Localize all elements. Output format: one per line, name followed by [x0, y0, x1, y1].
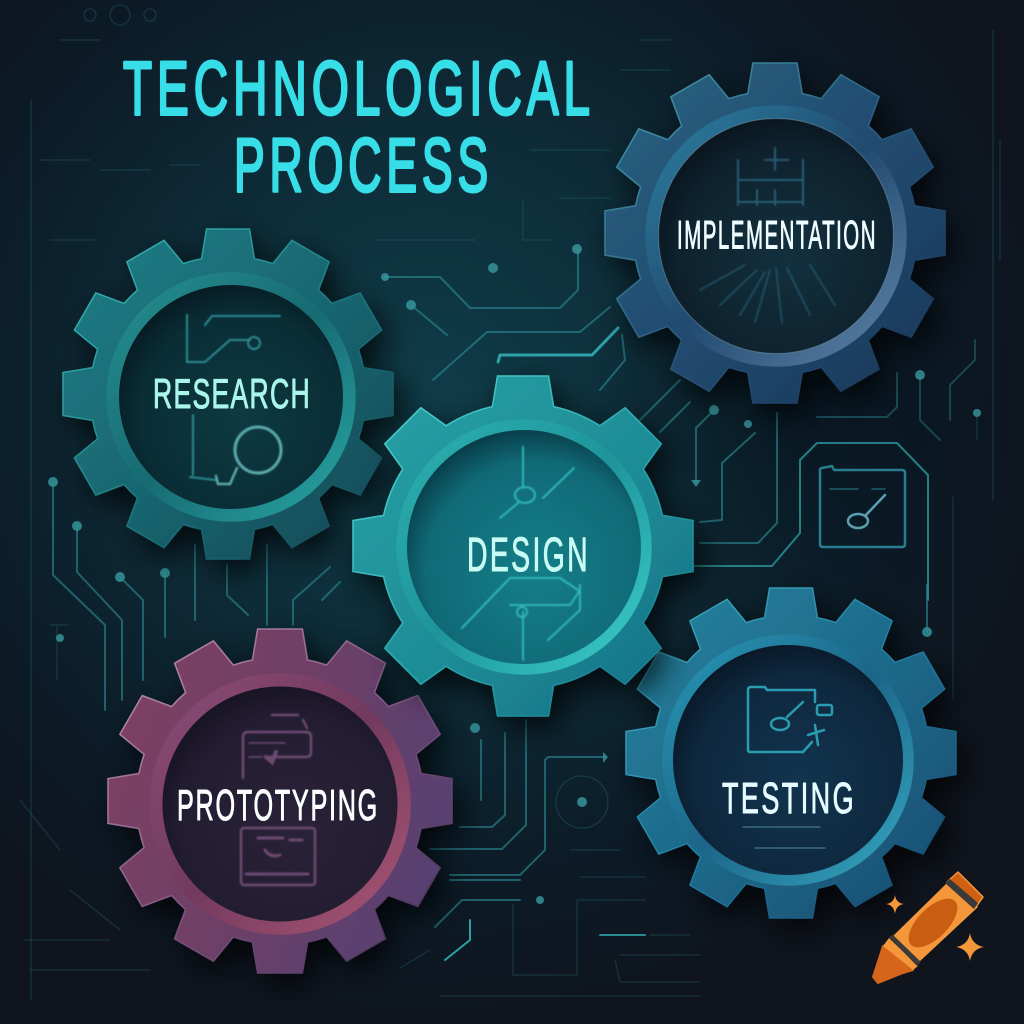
icon: panel glyph on circuit board — [820, 466, 905, 547]
icon: prototype wireframes — [241, 715, 315, 885]
icon: magnifier circuit — [187, 315, 281, 484]
title line two: PROCESS — [234, 124, 493, 208]
gear: prototyping — [108, 629, 452, 973]
gear: research — [63, 229, 393, 559]
gear: design — [353, 376, 693, 716]
title line one: TECHNOLOGICAL — [123, 46, 595, 132]
icon: schematic and rays — [700, 148, 835, 323]
label: prototyping: PROTOTYPING — [177, 781, 379, 830]
icon: test checklist — [743, 687, 832, 848]
title — [123, 46, 595, 208]
label: testing: TESTING — [722, 774, 856, 823]
label: design: DESIGN — [467, 529, 590, 582]
gear: implementation — [605, 63, 945, 403]
gear: testing — [626, 588, 956, 918]
icon: design sketch — [462, 447, 580, 660]
label: research: RESEARCH — [153, 370, 311, 417]
icon: crayon logo — [873, 872, 984, 983]
icon: sparkles — [886, 895, 984, 961]
